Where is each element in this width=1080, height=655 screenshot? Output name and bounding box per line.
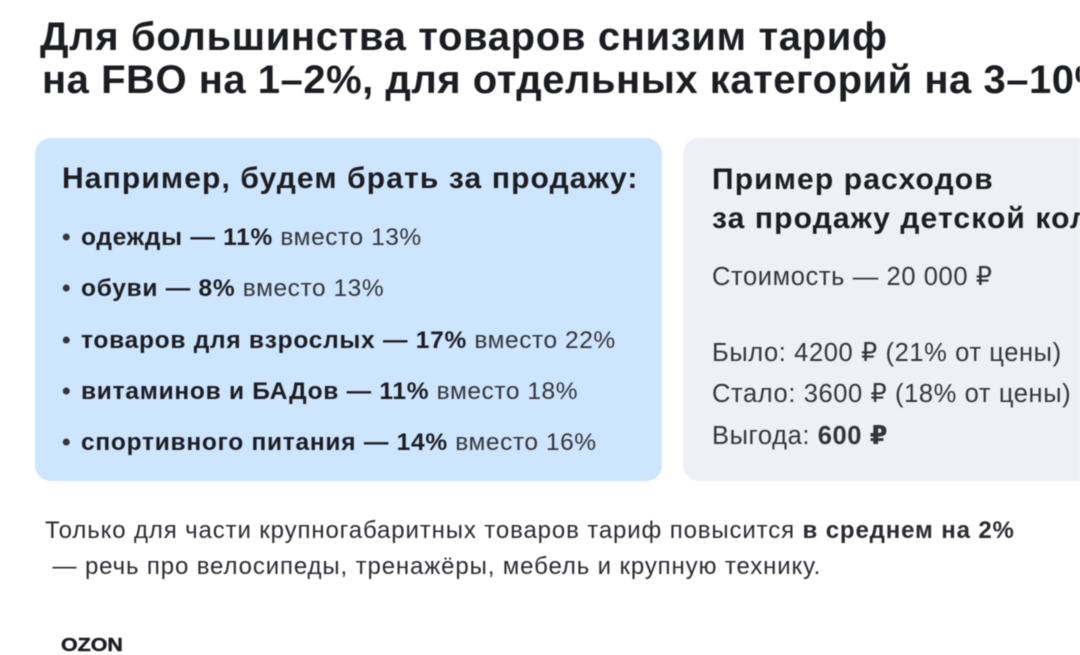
list item: shoes: обуви — 8% вместо 13% xyxy=(81,275,384,302)
footnote text: — речь про велосипеды, тренажёры, мебель и крупную технику. xyxy=(53,553,821,580)
list item: sports nutrition: спортивного питания — 14% вместо 16% xyxy=(81,429,597,456)
title: на FBO на 1–2%, для отдельных категорий на 3–10% xyxy=(42,58,1080,102)
list item: vitamins: витаминов и БАДов — 11% вместо 18% xyxy=(81,378,578,405)
list item: clothes: одежды — 11% вместо 13% xyxy=(81,224,422,251)
panel heading: Например, будем брать за продажу: xyxy=(62,162,639,195)
panel heading xyxy=(712,163,1080,235)
savings: Выгода: 600 ₽ xyxy=(712,422,888,450)
cost after: Стало: 3600 ₽ (18% от цены) xyxy=(712,380,1071,408)
list item: adult goods: товаров для взрослых — 17% вместо 22% xyxy=(81,327,616,354)
panel: stroller cost example xyxy=(683,138,1080,481)
footnote text xyxy=(44,517,1015,580)
logo: OZON: OZON xyxy=(61,635,123,655)
price: Стоимость — 20 000 ₽ xyxy=(712,263,993,291)
cost before: Было: 4200 ₽ (21% от цены) xyxy=(712,339,1062,367)
list item: clothes: • xyxy=(62,224,71,251)
title: Для большинства товаров снизим тариф xyxy=(40,15,888,59)
panel: commission examples xyxy=(35,138,662,481)
list item: sports nutrition: • xyxy=(62,429,71,456)
list item: vitamins: • xyxy=(62,378,71,405)
footnote text: Только для части крупногабаритных товаров тариф повысится в среднем на 2% xyxy=(45,517,1015,544)
list item: shoes: • xyxy=(62,275,71,302)
panel heading: Пример расходов xyxy=(712,163,994,196)
list item: adult goods: • xyxy=(62,327,71,354)
title xyxy=(40,15,1080,102)
